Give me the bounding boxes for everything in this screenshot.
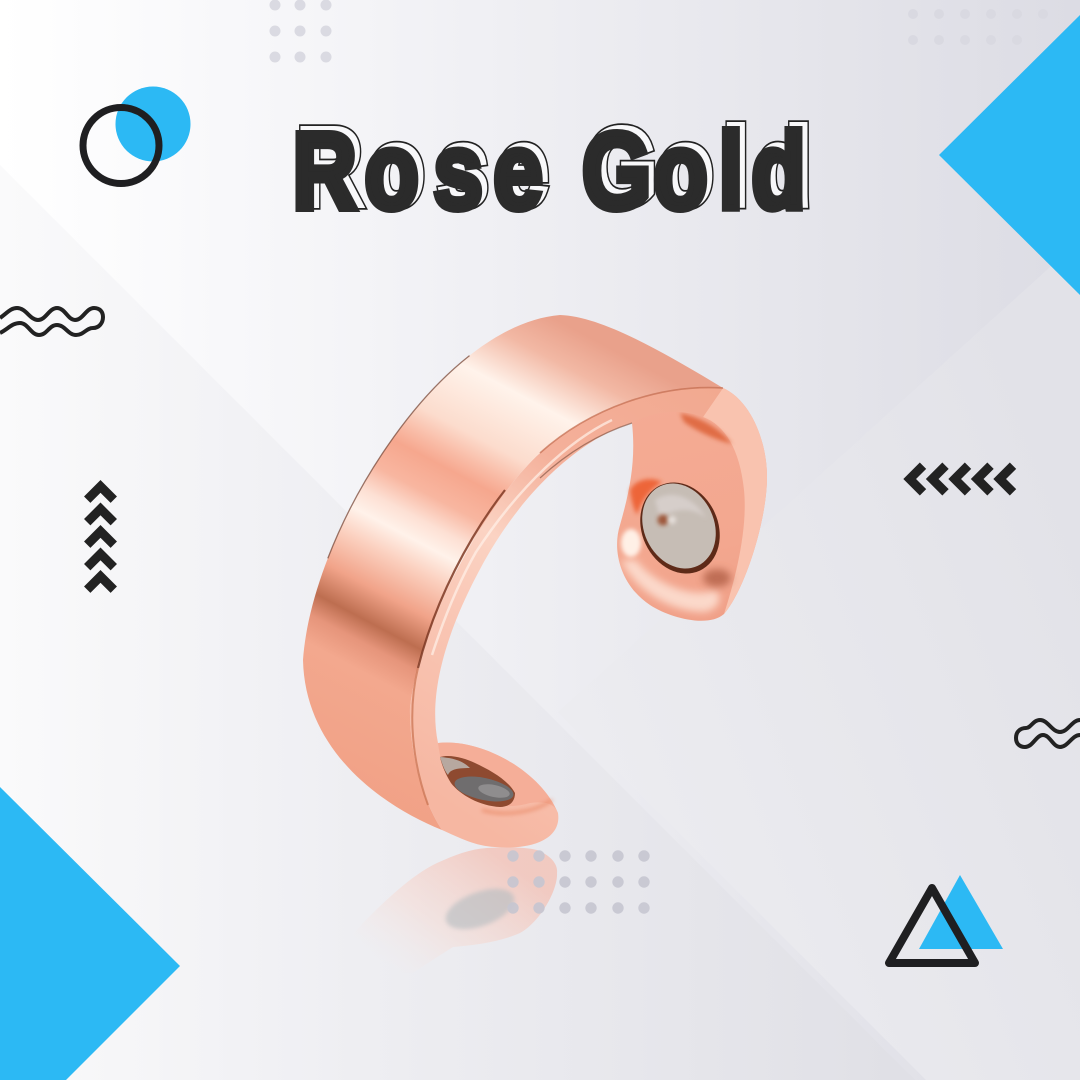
blue triangle: top right <box>939 15 1080 295</box>
ring: lip and left tip <box>410 388 723 848</box>
ring: left tip interior <box>438 742 558 813</box>
title: Rose <box>297 107 548 229</box>
ring reflection <box>320 847 557 973</box>
ring: right magnet <box>626 469 734 587</box>
ring: left magnet <box>440 756 516 807</box>
ring: outer band face <box>303 315 723 830</box>
dot grid: top right <box>908 9 1048 45</box>
icon: wavy line left <box>0 308 103 335</box>
ring: inner right end <box>617 388 767 621</box>
title: Gold <box>582 111 806 233</box>
blue triangle: bottom left <box>0 787 180 1080</box>
title: Gold <box>587 107 811 229</box>
title: Gold <box>587 107 811 229</box>
ring: edge lines <box>303 315 723 805</box>
title <box>292 107 811 233</box>
title: Rose <box>297 107 548 229</box>
icon: wavy line right <box>1016 720 1080 747</box>
icon: overlapping triangles <box>889 875 1003 963</box>
dot grid: top centre <box>270 0 332 62</box>
icon: left chevrons <box>910 466 1013 492</box>
title: Rose <box>292 111 543 233</box>
icon: up chevrons <box>87 486 114 590</box>
dot grid: bottom centre <box>507 850 650 914</box>
icon: overlapping circles <box>83 86 190 184</box>
rose gold ring <box>303 315 767 848</box>
ring: tip orange edge <box>482 800 552 813</box>
